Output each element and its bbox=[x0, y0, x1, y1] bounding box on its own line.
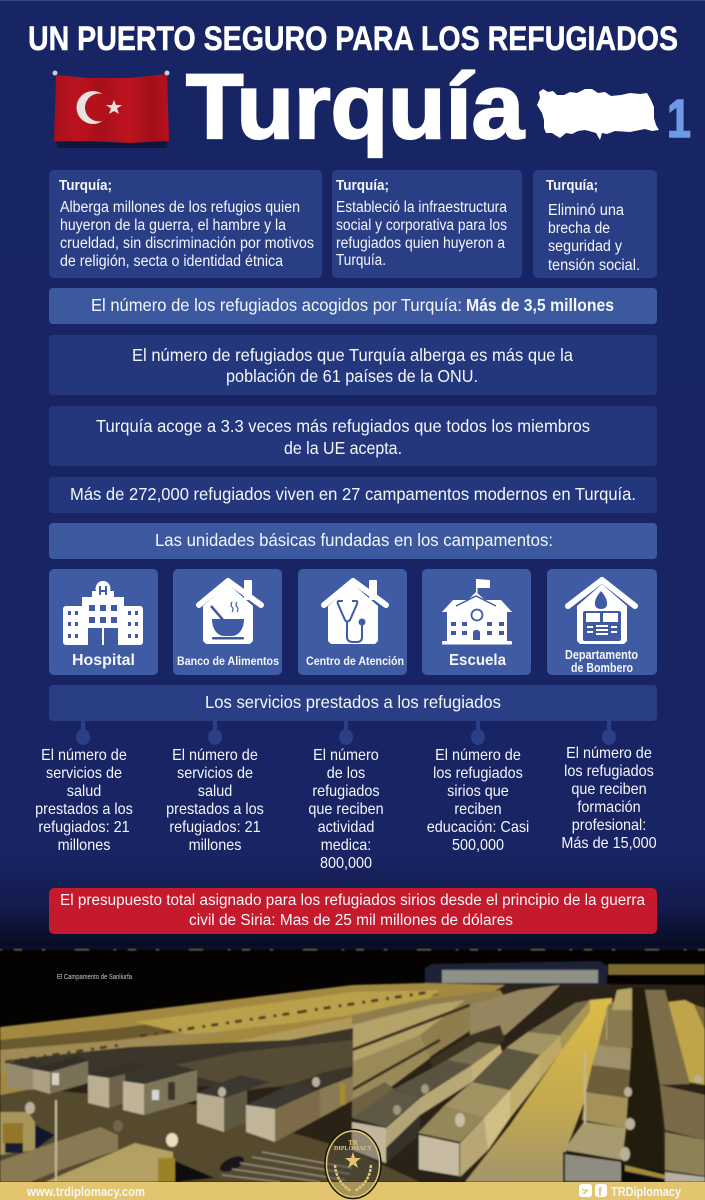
panel: infrastructure: refugiados quien huyeron a bbox=[336, 235, 505, 252]
card: school: Escuela bbox=[449, 652, 506, 669]
column: vocational training: que reciben bbox=[571, 781, 647, 798]
logo: TR Diplomacy emblem: TR bbox=[348, 1139, 359, 1147]
column: education: El número de bbox=[435, 747, 521, 764]
card: food bank bbox=[173, 569, 282, 675]
column: education: reciben bbox=[454, 801, 502, 818]
crosswalk bbox=[222, 1152, 352, 1182]
column: education: los refugiados bbox=[433, 765, 523, 782]
far right column and road bbox=[668, 1000, 705, 1085]
card: fire department bbox=[547, 569, 657, 675]
card: food bank: Banco de Alimentos bbox=[177, 654, 279, 668]
mid rows right bbox=[352, 990, 510, 1110]
column: health services 1: prestados a los bbox=[35, 801, 133, 818]
background bbox=[0, 0, 705, 950]
card: hospital: Hospital bbox=[72, 652, 135, 669]
panel: EU comparison: Turquía acoge a 3.3 veces más refugiados que todos los miembros bbox=[96, 416, 590, 436]
column: health services 1: salud bbox=[67, 783, 101, 800]
column: medical activity bbox=[308, 747, 384, 872]
banner: services: Los servicios prestados a los refugiados bbox=[205, 692, 501, 712]
icon: Turkish flag bbox=[52, 70, 170, 148]
column: health services 1: El número de bbox=[41, 747, 127, 764]
far rows left bbox=[0, 983, 505, 1095]
footer bar: www.trdiplomacy.com bbox=[26, 1185, 145, 1199]
far building bbox=[425, 961, 607, 985]
panel: security: Turquía; bbox=[546, 178, 598, 194]
panel: UN comparison: El número de refugiados que Turquía alberga es más que la bbox=[132, 345, 573, 365]
column: medical activity: actividad bbox=[318, 819, 374, 836]
panel: infrastructure: Turquía. bbox=[336, 252, 386, 269]
logo: TR Diplomacy emblem: DIPLOMACY bbox=[334, 1146, 373, 1152]
column: vocational training: profesional: bbox=[572, 817, 646, 834]
column: vocational training: Más de 15,000 bbox=[561, 835, 657, 852]
right column bbox=[625, 988, 665, 1175]
column: vocational training bbox=[561, 745, 657, 852]
banner: refugees hosted: Más de 3,5 millones bbox=[466, 295, 614, 315]
panel: infrastructure bbox=[332, 170, 522, 278]
panel: infrastructure: social y corporativa para los bbox=[336, 217, 507, 234]
column: health services 2: prestados a los bbox=[166, 801, 264, 818]
column: medical activity: refugiados bbox=[312, 783, 380, 800]
banner: basic units bbox=[49, 523, 657, 559]
column: medical activity: medica: bbox=[321, 837, 371, 854]
poles and dishes bbox=[25, 1008, 702, 1182]
icon: map of Turkey bbox=[537, 89, 659, 140]
caption: El Campamento de Sanliurfa bbox=[57, 974, 132, 981]
panel: shelter: Turquía; bbox=[59, 178, 112, 194]
column: education bbox=[427, 747, 529, 854]
connectors bbox=[76, 720, 616, 745]
panel: security bbox=[533, 170, 657, 278]
card: school bbox=[422, 569, 531, 675]
card: care center: Centro de Atención bbox=[306, 654, 404, 668]
column: health services 2: refugiados: 21 bbox=[169, 819, 261, 836]
column: health services 1 bbox=[35, 747, 133, 854]
panel: EU comparison: de la UE acepta. bbox=[284, 438, 402, 458]
banner: services bbox=[49, 685, 657, 721]
photo: refugee camp at night bbox=[0, 945, 705, 1182]
panel: EU comparison bbox=[49, 406, 657, 466]
footer bar: TRDiplomacy bbox=[611, 1185, 681, 1199]
heading: Turquía: Turquía bbox=[186, 56, 525, 158]
front right containers bbox=[352, 1090, 420, 1127]
panel: shelter: de religión, secta o identidad étnica bbox=[60, 253, 283, 270]
column: medical activity: El número bbox=[313, 747, 379, 764]
panel: UN comparison: población de 61 países de la ONU. bbox=[226, 366, 478, 386]
callout: budget: civil de Siria: Mas de 25 mil millones de dólares bbox=[189, 912, 513, 929]
footer bar bbox=[0, 1182, 705, 1200]
column: health services 1: refugiados: 21 bbox=[38, 819, 130, 836]
panel: security: Eliminó una bbox=[548, 202, 624, 219]
column: vocational training: formación bbox=[577, 799, 641, 816]
panel: camps bbox=[49, 477, 657, 513]
callout: budget: El presupuesto total asignado para los refugiados sirios desde el principio de la guerra bbox=[60, 892, 645, 909]
column: health services 2: El número de bbox=[172, 747, 258, 764]
banner: refugees hosted bbox=[49, 288, 657, 324]
dark roofs behind bbox=[10, 1028, 353, 1088]
left foreground bbox=[0, 1112, 35, 1155]
column: education: sirios que bbox=[447, 783, 509, 800]
ground bbox=[0, 983, 705, 1182]
column: medical activity: que reciben bbox=[308, 801, 384, 818]
panel: shelter: crueldad, sin discriminación por motivos bbox=[60, 235, 314, 252]
panel: infrastructure: Estableció la infraestructura bbox=[336, 199, 507, 216]
column: medical activity: 800,000 bbox=[320, 855, 372, 872]
containers bbox=[7, 1058, 50, 1070]
panel: security: tensión social. bbox=[548, 257, 640, 274]
column: education: educación: Casi bbox=[427, 819, 529, 836]
column: vocational training: El número de bbox=[566, 745, 652, 762]
panel: camps: Más de 272,000 refugiados viven en 27 campamentos modernos en Turquía. bbox=[70, 484, 636, 504]
column: health services 2: servicios de bbox=[177, 765, 253, 782]
callout: budget bbox=[49, 888, 657, 934]
road bbox=[465, 998, 612, 1182]
panel: UN comparison bbox=[49, 335, 657, 395]
panel: security: seguridad y bbox=[548, 238, 622, 255]
panel: security: brecha de bbox=[548, 220, 610, 237]
card: hospital bbox=[49, 569, 158, 675]
card: fire department: Departamento bbox=[565, 648, 638, 662]
banner: refugees hosted: El número de los refugiados acogidos por Turquía: bbox=[91, 295, 462, 315]
column: health services 2: salud bbox=[198, 783, 232, 800]
banner: basic units: Las unidades básicas fundadas en los campamentos: bbox=[155, 530, 553, 550]
column: health services 2: millones bbox=[189, 837, 241, 854]
column: vocational training: los refugiados bbox=[564, 763, 654, 780]
card: fire department: de Bombero bbox=[571, 661, 633, 675]
column: education: 500,000 bbox=[452, 837, 504, 854]
column: health services 1: millones bbox=[58, 837, 110, 854]
card: care center bbox=[298, 569, 407, 675]
page number: 1 bbox=[667, 89, 691, 149]
column: health services 1: servicios de bbox=[46, 765, 122, 782]
panel: shelter: Alberga millones de los refugios quien bbox=[60, 199, 300, 216]
footer bar: f bbox=[598, 1185, 603, 1199]
panel: shelter bbox=[49, 170, 322, 278]
column: medical activity: de los bbox=[327, 765, 365, 782]
panel: shelter: huyeron de la guerra, el hambre y la bbox=[60, 217, 286, 234]
logo: TR Diplomacy emblem bbox=[325, 1130, 381, 1198]
panel: infrastructure: Turquía; bbox=[336, 178, 389, 194]
column: health services 2 bbox=[166, 747, 264, 854]
